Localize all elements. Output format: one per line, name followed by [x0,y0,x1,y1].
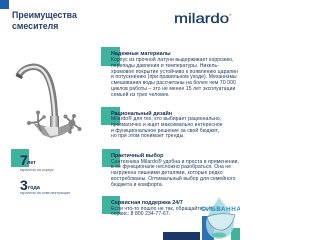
warranty: 3 years [20,177,70,195]
icon: faucet [16,64,82,138]
footer bar: navy [163,232,200,240]
green square [101,107,120,125]
green square [102,196,120,214]
text block: но при этом понимает тренды. [111,133,185,139]
green square [101,47,120,66]
body and handles [27,110,82,138]
logo: milardo: milardo® [174,10,231,26]
text block: и потускнению (при правильном уходе). Механизмы [111,74,237,80]
text block: семьей из трех человек. [111,92,170,98]
title: Преимущества [12,10,77,20]
text block: и функциональное решение за свой бюджет, [111,128,219,134]
text block: циклов работы – это не менее 15 лет эксплуатации [111,86,235,92]
text block: в ее функционале несложно разобраться. Она не [111,164,231,170]
text block: востребованы. Оптимальный выбор для семейного [111,176,236,182]
warranty: 3 years: 3 [20,177,28,193]
text block [111,158,239,188]
text block: Если что-то пошло не так, обращайтесь в наш [111,206,223,212]
panel: service [102,196,223,217]
warranty: 7 years [20,152,54,172]
text block: нагружена лишними деталями, которые редко [111,170,223,176]
text block: перепады давления и температуры. Никель- [111,63,219,69]
heading: Сервисная поддержка 24/7 [111,200,183,206]
blue block [202,216,214,240]
watermark: Sibvanna [201,197,240,240]
spout [16,67,55,120]
text block [111,116,223,139]
heading: Надежные материалы [111,51,171,57]
title: смесителя [12,21,58,31]
warranty: 7 years: 7 [20,152,28,168]
panel: design [101,107,223,139]
warranty: 7 years: гарантия на корпус [20,168,54,172]
panel: materials [101,47,238,98]
text block: Milardo® для тех, кто выбирает рационально, [111,116,221,122]
text block: бюджета и комфорта. [111,182,163,188]
green square: warranty [11,149,29,167]
text block [111,57,238,98]
warranty: 7 years: лет [27,160,36,166]
heading: Рациональный дизайн [111,111,172,117]
title [12,10,77,31]
warranty: 3 years: года [28,184,40,190]
text block: сервис: 8 800 234-77-67. [111,211,170,217]
footer bar: teal [231,228,240,240]
panel: practical [102,149,239,188]
heading: Практичный выбор [111,153,163,159]
text block: смешивания воды рассчитаны на более чем 70 000 [111,80,236,86]
text block: прагматично и ищет максимально интересное [111,122,223,128]
corner block [0,0,9,9]
text block: Корпус из прочной латуни выдерживает коррозию, [111,57,234,63]
text block [111,206,223,217]
green square [102,149,120,167]
water drop [206,197,235,239]
warranty: 3 years: гарантия на комплектующие [20,191,70,195]
text block: хромовое покрытие устойчиво к появлению царапин [111,68,238,74]
text block: Сантехника Milardo® удобна и проста в применении, [111,158,239,164]
